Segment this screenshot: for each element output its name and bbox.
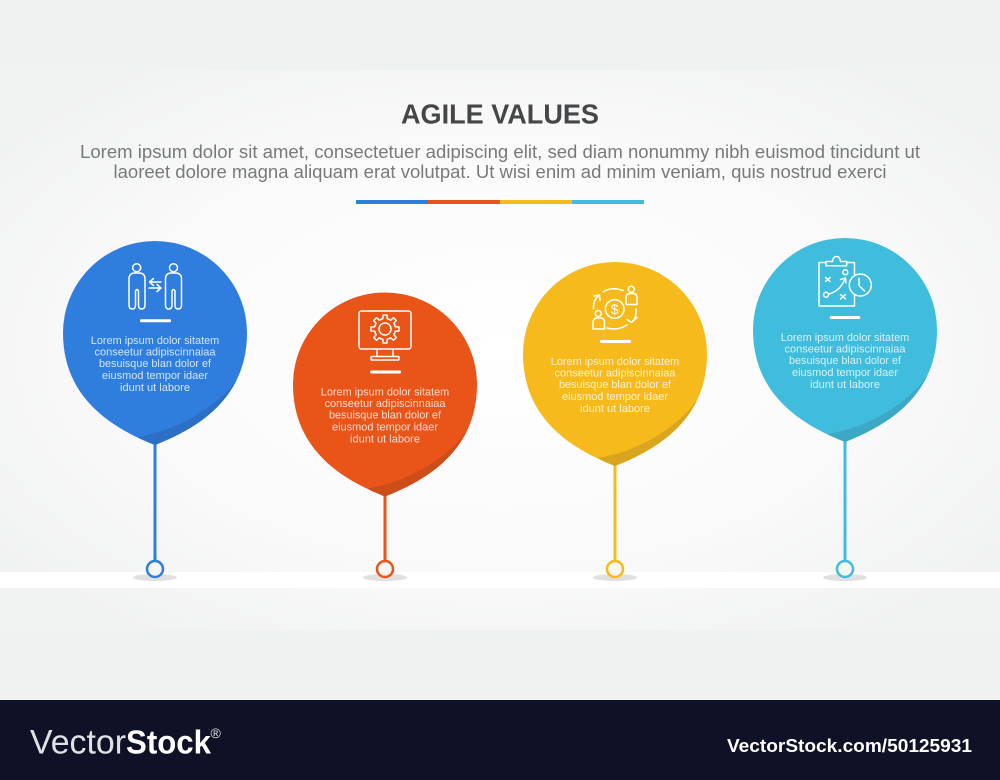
footer logo: Stock — [126, 724, 212, 760]
footer bar — [0, 700, 1000, 780]
dollar sign: $ — [611, 301, 619, 317]
text block 3: eiusmod tempor idaer — [562, 391, 668, 403]
stem and ring 3 — [593, 460, 637, 581]
text block 1: idunt ut labore — [120, 382, 190, 394]
text block 3 — [551, 356, 679, 415]
pin 2: orange — [293, 292, 485, 581]
pin 1: blue — [63, 241, 255, 581]
stem and ring 2 — [363, 490, 407, 581]
text block 1: Lorem ipsum dolor sitatem — [91, 335, 219, 347]
stem and ring 1 — [133, 440, 177, 581]
text block 2: conseetur adipiscinnaiaa — [324, 398, 446, 410]
text block 2: idunt ut labore — [350, 433, 420, 445]
balloon 1 — [63, 241, 255, 458]
text block 1: conseetur adipiscinnaiaa — [94, 346, 216, 358]
text block 4 — [781, 332, 909, 391]
text block 1: eiusmod tempor idaer — [102, 370, 208, 382]
footer logo — [30, 724, 222, 762]
dash 1 — [140, 319, 171, 322]
text block 4: besuisque blan dolor ef — [789, 355, 902, 367]
subtitle text — [80, 142, 920, 182]
icon: two people exchanging — [129, 264, 182, 309]
balloon 2 — [293, 292, 485, 510]
baseline band — [0, 572, 1000, 588]
text block 3: idunt ut labore — [580, 403, 650, 415]
text block 1: besuisque blan dolor ef — [99, 358, 212, 370]
color divider — [356, 200, 644, 204]
text block 4: conseetur adipiscinnaiaa — [784, 344, 906, 356]
dash 4 — [830, 316, 860, 319]
footer logo: Vector — [30, 724, 126, 762]
text block 1 — [91, 335, 219, 394]
text block 3: Lorem ipsum dolor sitatem — [551, 356, 679, 368]
balloon 3 — [523, 262, 715, 479]
icon: clipboard plan with clock — [819, 256, 871, 306]
text block 2: besuisque blan dolor ef — [329, 410, 442, 422]
text block 4: idunt ut labore — [810, 379, 880, 391]
text block 4: Lorem ipsum dolor sitatem — [781, 332, 909, 344]
text block 4: eiusmod tempor idaer — [792, 367, 898, 379]
text block 2: eiusmod tempor idaer — [332, 422, 438, 434]
text block 3: conseetur adipiscinnaiaa — [554, 368, 676, 380]
dash 2 — [370, 370, 401, 374]
subtitle text: Lorem ipsum dolor sit amet, consectetuer adipiscing elit, sed diam nonummy nibh euismod tincidunt ut — [80, 142, 920, 162]
icon: money exchange cycle — [593, 286, 637, 329]
pin 4: cyan — [753, 238, 945, 581]
footer image id: VectorStock.com/50125931 — [727, 736, 972, 756]
subtitle text: laoreet dolore magna aliquam erat volutpat. Ut wisi enim ad minim veniam, quis nostrud exerci — [114, 162, 886, 182]
dash 3 — [600, 340, 631, 343]
text block 3: besuisque blan dolor ef — [559, 379, 672, 391]
icon: monitor with gear — [359, 311, 411, 360]
title: AGILE VALUES — [401, 98, 599, 130]
pin 3: yellow — [523, 262, 715, 581]
stem and ring 4 — [823, 436, 867, 581]
balloon 4 — [753, 238, 945, 455]
footer logo: ® — [210, 725, 222, 741]
text block 2: Lorem ipsum dolor sitatem — [321, 386, 449, 398]
text block 2 — [321, 386, 449, 445]
